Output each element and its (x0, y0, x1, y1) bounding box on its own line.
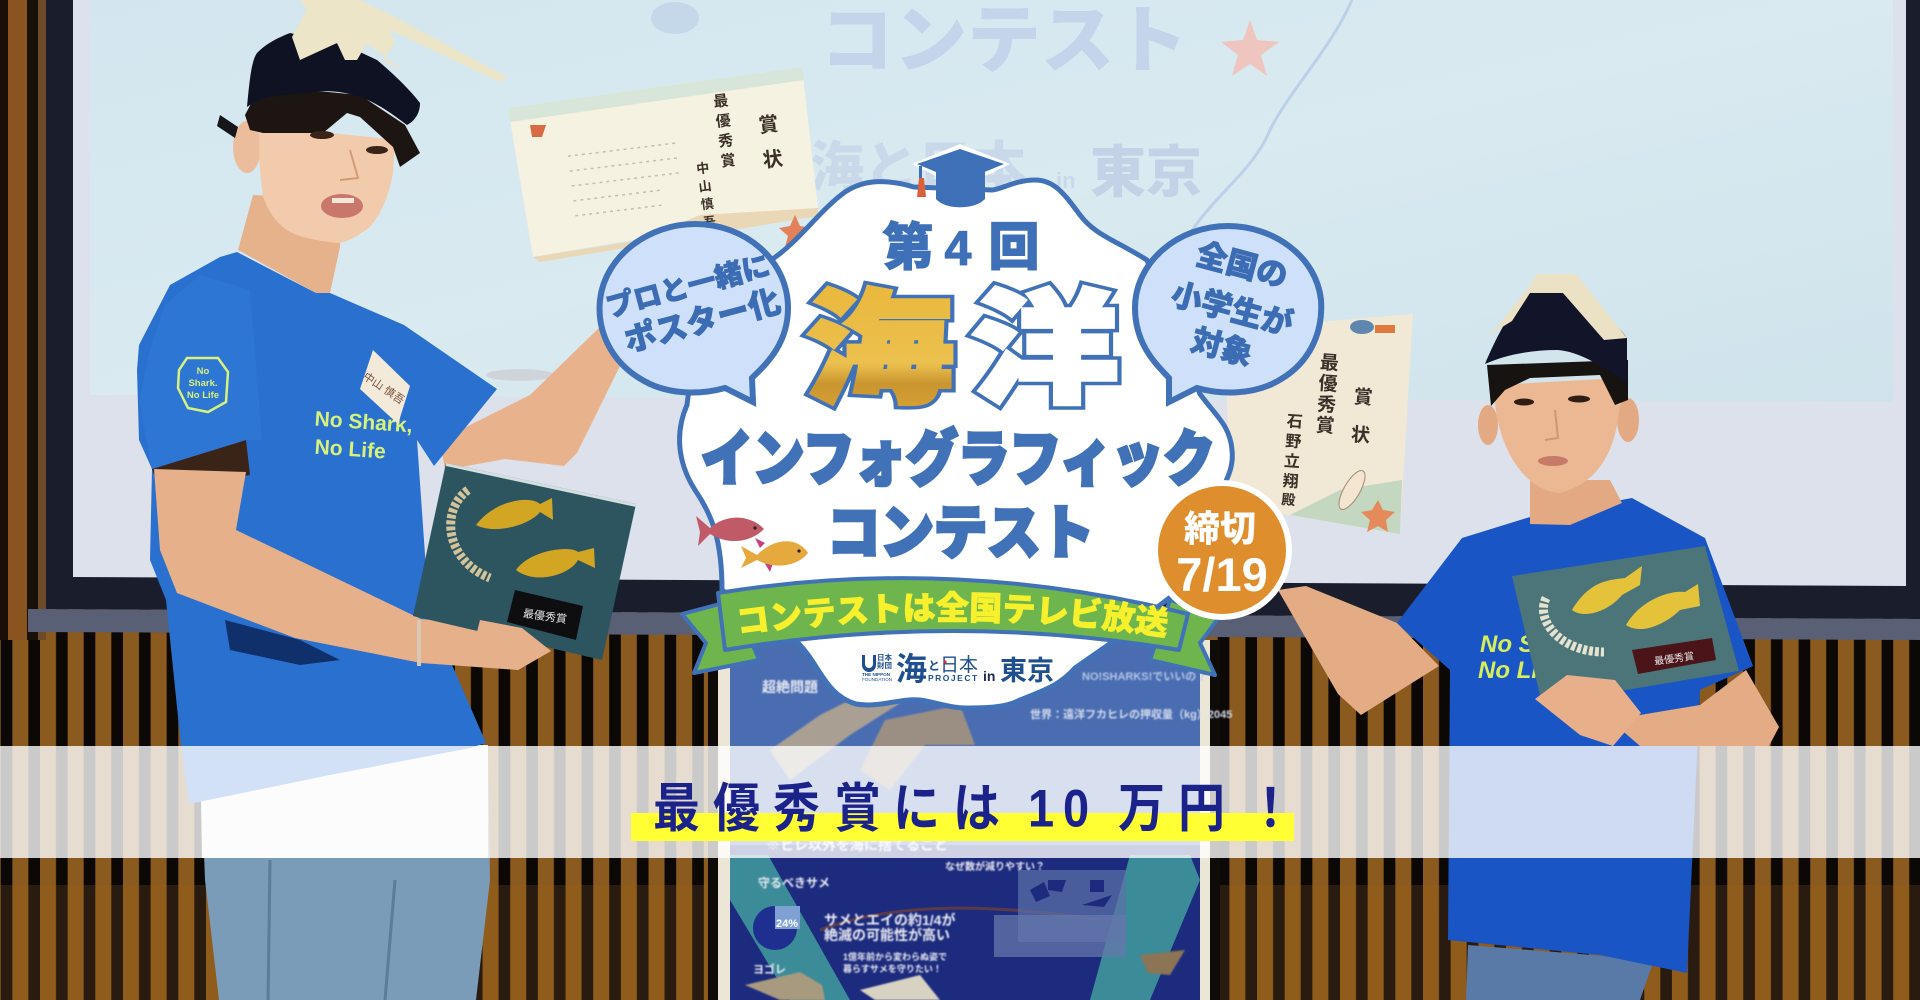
ribbon text (738, 619, 1170, 636)
plaque gold fish (476, 498, 595, 577)
plaque maroon label (1632, 638, 1716, 674)
yellow highlight bar (631, 813, 1294, 841)
poster text (753, 671, 1232, 976)
left certificate: 賞 (720, 152, 737, 171)
right certificate: 状 (1350, 424, 1371, 447)
screen title faint text: 東京 (1090, 141, 1202, 204)
poster board on stand (708, 640, 1232, 1000)
poster pie chart (753, 906, 800, 950)
poster text: 世界：遠洋フカヒレの押収量（kg）2045 (1030, 707, 1232, 721)
edition heading: 回 (988, 219, 1040, 276)
left person ear (233, 121, 261, 173)
poster text: 暮らすサメを守りたい！ (843, 963, 942, 974)
right person neck (1530, 480, 1622, 525)
edition heading: 第 (882, 219, 934, 276)
right bubble text: 小学生が (1167, 277, 1296, 342)
green ribbon banner: コンテストは全国テレビ放送 (739, 590, 1168, 638)
plaque black label (507, 590, 583, 640)
deadline circle: 締切 (1184, 508, 1256, 549)
poster text: 1億年前から変わらぬ姿で (843, 951, 947, 962)
right person shirt print: No Sh (1480, 631, 1549, 658)
right certificate: 立 (1283, 452, 1301, 471)
left person (137, 0, 622, 1000)
ribbon left tail (682, 600, 759, 673)
kaiyo logotype: 洋 (972, 282, 1118, 418)
poster comparison table (994, 870, 1126, 957)
right certificate: 秀 (1316, 393, 1337, 417)
left bubble text: ポスター化 (620, 283, 784, 359)
bottom translucent band (0, 746, 1920, 858)
left person face (259, 125, 395, 243)
right person hand (1535, 675, 1641, 746)
right certificate: 野 (1285, 432, 1302, 451)
right person ears (1478, 405, 1498, 445)
in tokyo: in (983, 668, 995, 684)
icon: graduation cap (912, 144, 1010, 212)
screen decoration: coast line and star (486, 0, 1352, 381)
left certificate: 賞 (757, 112, 780, 138)
left bubble text (603, 250, 784, 359)
left person jeans (200, 745, 490, 1000)
poster text: サメとエイの約1/4が (824, 912, 955, 928)
umi to nippon project (896, 651, 979, 687)
plaque black label: 最優秀賞 (522, 607, 568, 626)
left person eyes and mouth (310, 131, 388, 218)
right certificate: 最 (1319, 352, 1340, 375)
contest badge (680, 144, 1232, 708)
right person shirt print: No Li (1478, 657, 1539, 684)
poster teal waves (730, 855, 850, 1000)
kaiyo logotype: 海 (807, 282, 953, 418)
poster pie chart: 24% (776, 918, 798, 930)
right certificate: 賞 (1353, 386, 1373, 409)
poster text: ※ヒレ以外を海に捨てること (766, 837, 948, 853)
kaiyo logotype (807, 282, 1118, 418)
right person holding arm (1610, 670, 1779, 746)
in tokyo: 東京 (1000, 656, 1054, 686)
right certificate: 翔 (1282, 472, 1299, 491)
left certificate: 吾 (702, 214, 717, 230)
left person shirt print (312, 408, 413, 465)
right person hair (1487, 360, 1628, 406)
umi to nippon project: 日本 (940, 654, 978, 676)
poster shark silhouettes (745, 695, 1185, 1000)
right person eyes and mouth (1514, 396, 1590, 466)
nippon foundation mark: 日本 (877, 652, 892, 662)
left person neck (238, 195, 340, 293)
umi to nippon project: PROJECT (928, 673, 979, 683)
projection screen (28, 0, 1920, 640)
nippon foundation mark: FOUNDATION (862, 677, 892, 682)
right speech bubble (1135, 226, 1321, 402)
left person name tag (360, 350, 410, 424)
plaque maroon label: 最優秀賞 (1653, 649, 1695, 668)
umi to nippon project: と (928, 659, 940, 673)
green ribbon banner (680, 576, 1220, 677)
icon: yellow fish (741, 538, 808, 572)
ribbon main band (718, 578, 1188, 650)
badge body (680, 180, 1232, 708)
icon: red fish (696, 516, 764, 546)
left person shirt (137, 252, 497, 804)
left bubble text: プロと一緒に (603, 250, 773, 323)
infographic title: インフォグラフィック (701, 426, 1215, 493)
right person shirt print (1478, 631, 1549, 684)
screen title faint text: コンテスト (820, 0, 1188, 82)
left certificate: 優 (715, 112, 732, 131)
right certificate: 賞 (1315, 414, 1335, 438)
left certificate: 秀 (717, 132, 734, 151)
left award plaque (413, 463, 636, 670)
left person sleeve logo: No Life (187, 390, 219, 401)
poster text: 守るべきサメ (758, 875, 830, 890)
left person name tag: 中山 慎吾 (361, 369, 407, 407)
poster text: NO!SHARKS!でいいの？ (1082, 671, 1207, 683)
left person sleeve logo (178, 358, 228, 412)
edition heading: 4 (945, 223, 972, 276)
right person shirt (1397, 498, 1753, 973)
left person sleeve logo: No (197, 366, 210, 377)
left person shirt print: No Shark, (314, 408, 413, 437)
left certificate (508, 67, 818, 262)
contest title: コンテスト (827, 501, 1094, 566)
deadline circle (1152, 480, 1292, 620)
screen title faint text (810, 0, 1202, 204)
ribbon right tail (1150, 600, 1220, 675)
organiser logo (862, 651, 1054, 687)
right bubble text (1167, 237, 1296, 372)
right person shark hat (1473, 274, 1627, 345)
left certificate: 中 (695, 160, 710, 177)
right person face (1494, 378, 1620, 493)
left person sleeve logo: Shark. (188, 378, 218, 389)
left person cap (247, 33, 420, 125)
right bubble text: 全国の (1192, 237, 1291, 294)
kaiyo logotype: 洋 (972, 282, 1118, 418)
prize headline: 最優秀賞には 10 万円！ (653, 779, 1294, 838)
poster text: なぜ数が減りやすい？ (945, 860, 1045, 873)
right person cap (1485, 292, 1627, 383)
left certificate: 山 (698, 178, 712, 194)
edition heading (882, 219, 1040, 276)
left person raised arm (440, 325, 622, 470)
right person raised arm (1278, 586, 1439, 715)
deadline circle: 7/19 (1176, 548, 1268, 601)
left person hair (245, 90, 420, 167)
right bubble text: 対象 (1187, 323, 1256, 372)
poster text: 絶滅の可能性が高い (824, 927, 950, 943)
right person (1278, 274, 1779, 1000)
right certificate: 優 (1318, 372, 1338, 396)
right certificate: 殿 (1281, 491, 1296, 508)
screen title faint text: in (1056, 168, 1076, 193)
left person shark hat (292, 0, 507, 82)
right person jeans (1466, 945, 1654, 1000)
nippon foundation mark: 財団 (877, 660, 892, 670)
left speech bubble (600, 224, 788, 402)
right certificate: 石 (1286, 413, 1303, 431)
left person forearm and hand (154, 469, 551, 670)
left certificate: 状 (761, 147, 784, 172)
plaque gold fish (1572, 566, 1700, 629)
umi to nippon project: 海 (896, 651, 927, 687)
left certificate: 慎 (700, 196, 715, 212)
left person shirt print: No Life (314, 436, 387, 464)
poster text: 超絶問題 (762, 679, 818, 695)
screen title faint text: 海と日本 (810, 138, 1026, 198)
poster text: ヨゴレ (753, 962, 786, 976)
left person cap strap (217, 115, 238, 138)
nippon foundation mark (862, 652, 892, 682)
nippon foundation mark: THE NIPPON (862, 672, 891, 677)
right award plaque (1512, 546, 1739, 746)
left certificate: 最 (712, 92, 729, 111)
kaiyo logotype: 海 (807, 282, 953, 418)
right certificate (1225, 314, 1413, 534)
